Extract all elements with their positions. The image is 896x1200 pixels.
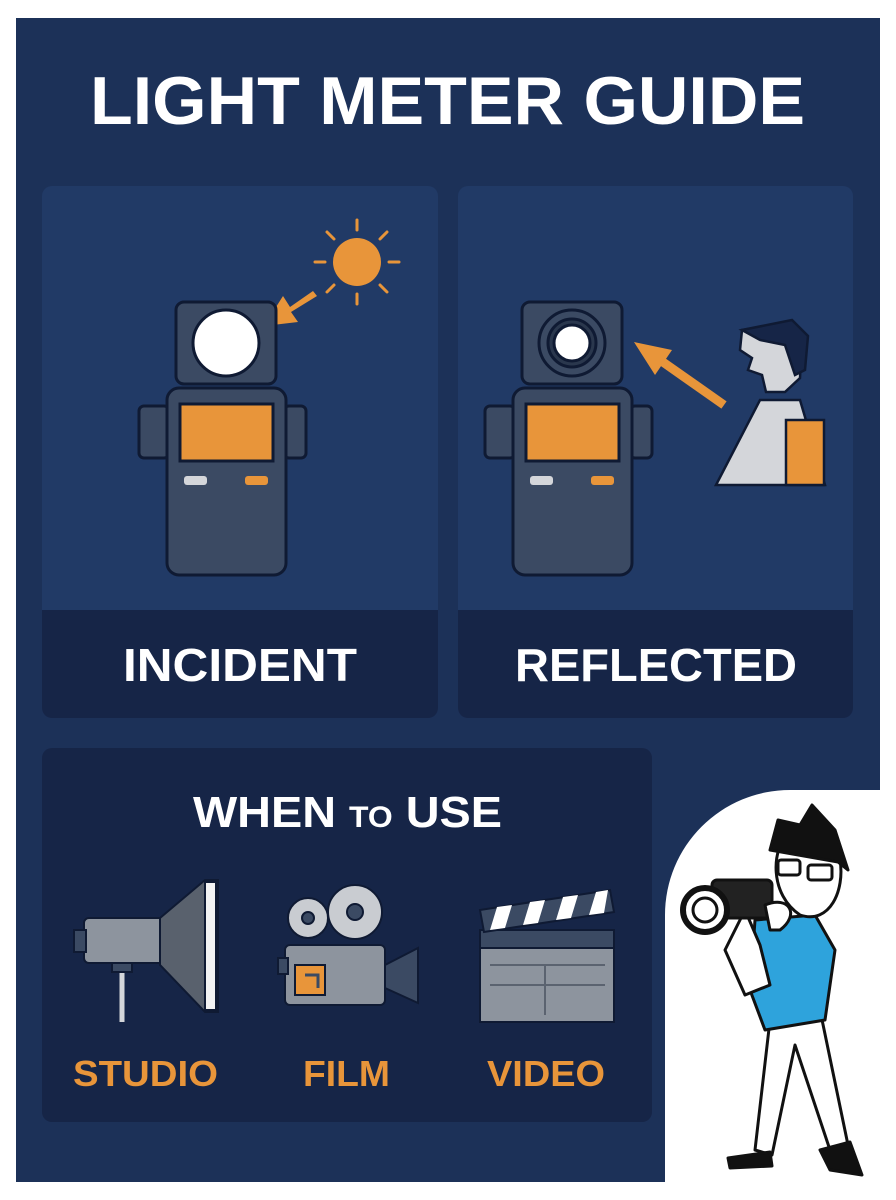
title: LIGHT METER GUIDE <box>90 63 805 139</box>
label: film: FILM <box>303 1053 390 1094</box>
panel: when to use <box>42 748 652 1122</box>
icon: incident meter <box>139 302 306 575</box>
illustration: photographer cartoon <box>683 805 862 1175</box>
panel: reflected <box>458 186 853 718</box>
heading: when to use: WHEN TO USE <box>193 788 502 837</box>
icon: sun <box>315 220 399 304</box>
icon: clapperboard <box>480 890 614 1022</box>
icon: reflected meter <box>485 302 652 575</box>
label: studio: STUDIO <box>73 1053 218 1094</box>
label: incident: INCIDENT <box>123 639 357 691</box>
panel: incident <box>42 186 438 718</box>
icon: subject person <box>716 320 825 485</box>
arrow: light to meter <box>264 291 317 326</box>
label: reflected: REFLECTED <box>515 639 797 691</box>
label: video: VIDEO <box>487 1053 605 1094</box>
arrow: subject to meter <box>634 342 724 405</box>
icon: film camera <box>278 885 418 1005</box>
icon: studio light <box>74 880 218 1022</box>
